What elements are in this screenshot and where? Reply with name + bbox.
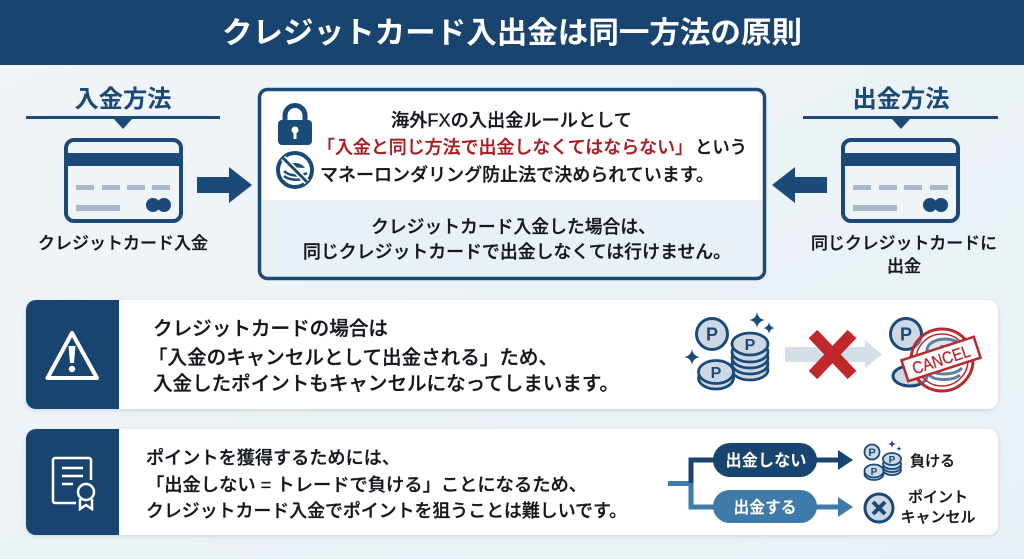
text: rule statement: 海外FXの入出金ルールとして: [391, 110, 632, 130]
label: point cancel: [900, 489, 976, 526]
text: point explanation: クレジットカード入金でポイントを狙うことは難しいです。: [146, 501, 627, 521]
arrow: deposit to rule: [197, 167, 252, 203]
icon: point coins: P: [745, 337, 756, 354]
heading: deposit method: 入金方法: [74, 86, 172, 113]
label: lose: 負ける: [910, 453, 955, 470]
icon: point coins: [684, 312, 774, 389]
icon: cancelled coins: CANCEL: [910, 342, 973, 378]
text: warning message: クレジットカードの場合は: [153, 318, 388, 340]
icon: small coins: P: [868, 447, 876, 459]
label: point cancel: キャンセル: [900, 509, 976, 526]
text: point explanation: [146, 448, 627, 521]
icon: small coins: P: [889, 455, 896, 466]
icon: small coins: [864, 440, 902, 480]
text: point explanation: 「出金しない = トレードで負ける」ことになるため、: [146, 475, 587, 495]
text: warning message: [148, 318, 619, 395]
text: warning message: 入金したポイントもキャンセルになってしまいます。: [153, 373, 619, 395]
icon: cancelled coins: P: [939, 342, 951, 362]
text: rule statement: 「入金と同じ方法で出金しなくてはならない」: [317, 138, 693, 158]
label: same credit card withdrawal: 出金: [887, 257, 921, 276]
title banner: [0, 0, 1024, 65]
icon: no money laundering: [278, 153, 312, 187]
label: same credit card withdrawal: [811, 234, 997, 276]
heading: withdrawal method: 出金方法: [852, 86, 950, 113]
arrow: withdrawal to rule: [772, 167, 827, 203]
text: credit card conclusion: クレジットカード入金した場合は、: [371, 217, 656, 237]
branch: no withdrawal: [713, 443, 853, 477]
label: credit card deposit: クレジットカード入金: [38, 234, 208, 253]
icon: cancelled coins: [890, 318, 981, 391]
icon: credit card: [66, 140, 181, 221]
text: rule statement: という: [695, 138, 747, 158]
panel: deposit method: [26, 86, 220, 253]
icon: point coins: P: [711, 365, 722, 382]
text: rule statement: [317, 110, 747, 185]
panel: point acquisition: [26, 429, 998, 535]
text: point explanation: ポイントを獲得するためには、: [146, 448, 400, 468]
icon: certificate: [53, 458, 94, 509]
icon: small coins: P: [871, 467, 878, 478]
branch: withdrawal: [713, 490, 853, 523]
branch: withdrawal: 出金する: [734, 497, 796, 517]
icon: cancel circle: [865, 494, 893, 522]
label: point cancel: ポイント: [908, 489, 968, 506]
arrow: blocked conversion: [785, 334, 882, 375]
icon: point coins: P: [706, 324, 718, 344]
chart: branch diagram: [668, 440, 976, 526]
label: same credit card withdrawal: 同じクレジットカードに: [811, 234, 997, 253]
icon: credit card: [843, 140, 958, 221]
text: rule statement: マネーロンダリング防止法で決められています。: [320, 165, 714, 185]
text: warning message: 「入金のキャンセルとして出金される」ため、: [148, 347, 558, 369]
title banner: クレジットカード入出金は同一方法の原則: [222, 17, 802, 50]
branch: no withdrawal: 出金しない: [726, 450, 806, 470]
icon: cancelled coins: P: [900, 324, 912, 344]
panel: withdrawal method: [803, 86, 998, 276]
panel: warning: [26, 300, 998, 409]
icon: warning triangle: [48, 333, 97, 378]
text: credit card conclusion: [303, 217, 731, 262]
icon: padlock: [278, 106, 312, 145]
text: credit card conclusion: 同じクレジットカードで出金しなくては行けません。: [303, 242, 731, 262]
panel: central rule: [258, 88, 766, 280]
